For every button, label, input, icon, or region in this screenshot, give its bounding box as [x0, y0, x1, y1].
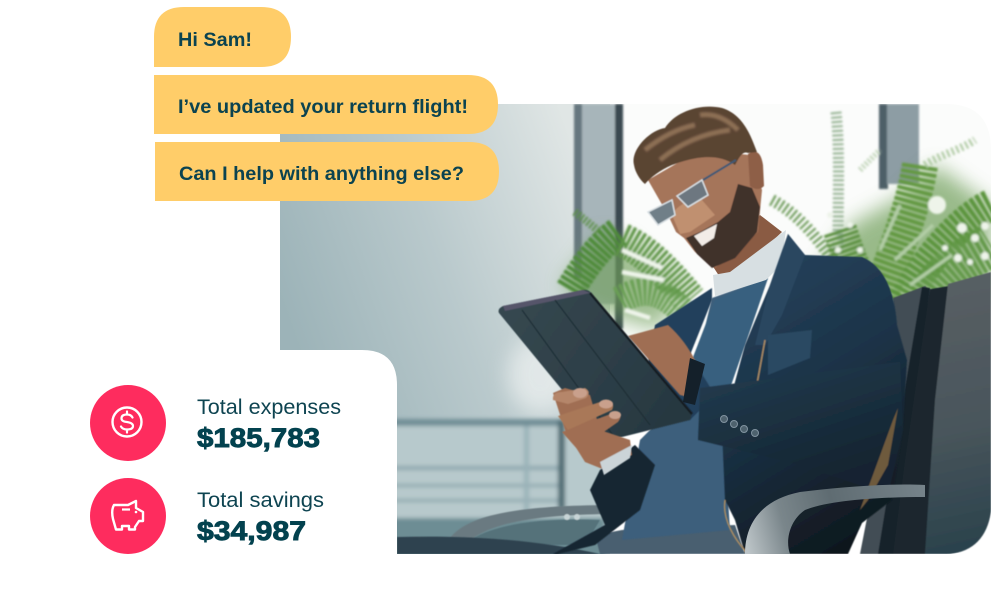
shirt collar	[713, 230, 786, 296]
head	[633, 107, 764, 268]
face	[648, 150, 762, 268]
fern: left	[562, 212, 690, 330]
chat bubble: greeting: Hi Sam!	[178, 30, 252, 51]
stat: total savings	[90, 478, 324, 554]
chair backrests	[860, 272, 991, 554]
panel: airport lounge photo	[280, 104, 991, 558]
chat bubble: greeting	[154, 7, 291, 67]
chat bubble: offer help	[155, 142, 499, 201]
left armrest	[450, 505, 606, 545]
soft light patch on wall	[508, 337, 572, 413]
panel: stats card	[90, 385, 341, 554]
ear	[748, 152, 764, 189]
right window frame	[879, 104, 919, 189]
watch strap	[683, 358, 705, 405]
jacket buttons	[720, 416, 758, 436]
hair	[633, 107, 757, 184]
trousers	[397, 525, 745, 554]
beard	[686, 184, 760, 268]
label: total savings: Total savings	[197, 489, 324, 512]
left window frame	[574, 104, 623, 329]
value: total savings: $34,987	[197, 516, 306, 546]
chat bubble: offer help: Can I help with anything else?	[179, 164, 464, 185]
sweater	[622, 278, 768, 540]
label: total expenses: Total expenses	[197, 396, 341, 419]
icon: dollar coin	[90, 385, 166, 461]
balustrade	[390, 419, 605, 558]
right armrest	[745, 484, 925, 554]
tablet	[498, 290, 692, 440]
glasses	[648, 160, 736, 225]
window glass	[620, 104, 991, 344]
smile	[694, 224, 717, 246]
fern: right	[772, 112, 991, 300]
neck	[713, 215, 782, 274]
icon: piggy bank	[90, 478, 166, 554]
holding hand	[553, 388, 632, 475]
jacket	[553, 234, 907, 554]
tapping hand	[628, 325, 696, 398]
chat bubble: flight update	[154, 75, 498, 134]
stat: total expenses	[90, 385, 341, 461]
value: total expenses: $185,783	[197, 423, 320, 453]
chat bubble: flight update: I’ve updated your return flight!	[178, 97, 468, 118]
